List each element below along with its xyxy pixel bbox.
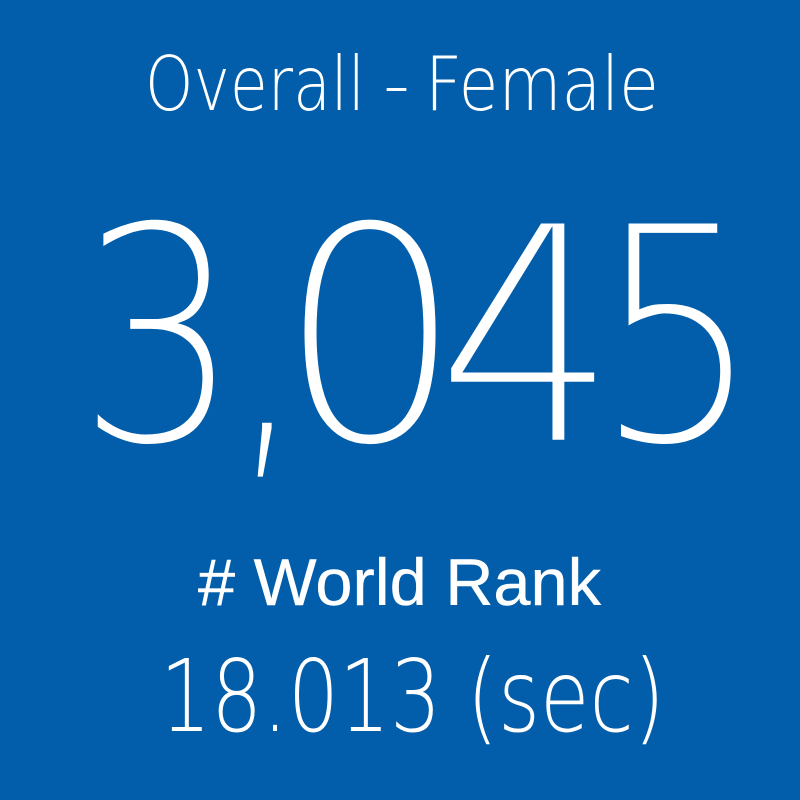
title: - (383, 40, 410, 128)
big number: rank: 0 (277, 163, 464, 513)
title (145, 40, 659, 128)
big number: rank: , (230, 145, 304, 516)
big number: rank (77, 145, 761, 516)
value: time in seconds: 18.013 (sec) (160, 638, 665, 755)
label: world rank: # World Rank (198, 545, 602, 619)
title: Female (425, 40, 659, 128)
title: Overall (145, 40, 365, 128)
big number: rank: 3 (77, 162, 241, 512)
big number: rank: 5 (594, 163, 761, 512)
big number: rank: 4 (436, 164, 618, 513)
